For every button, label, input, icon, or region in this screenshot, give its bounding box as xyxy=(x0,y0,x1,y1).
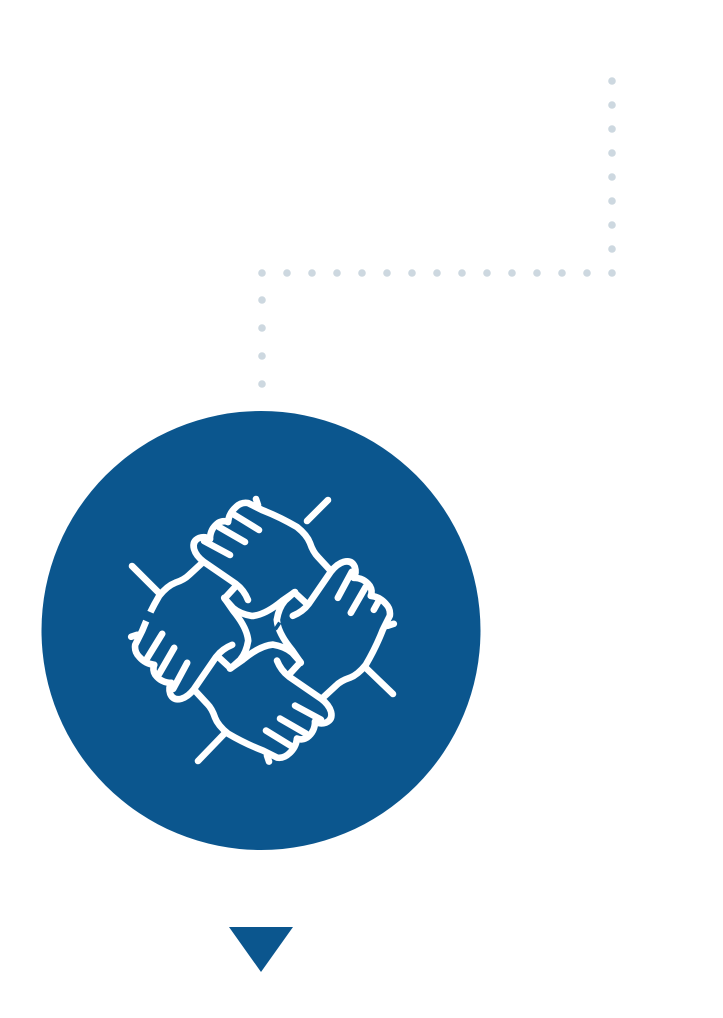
hand: top xyxy=(194,499,330,616)
hand: left xyxy=(131,563,248,699)
dotted connector line xyxy=(258,77,616,388)
down arrow triangle xyxy=(229,927,293,972)
hand: right xyxy=(277,561,394,698)
hand: bottom xyxy=(195,645,331,762)
sleeve ticks xyxy=(132,500,393,761)
blue circle xyxy=(42,411,480,850)
icon: four interlocking hands xyxy=(131,499,394,762)
gaps in hand outlines xyxy=(146,612,279,627)
